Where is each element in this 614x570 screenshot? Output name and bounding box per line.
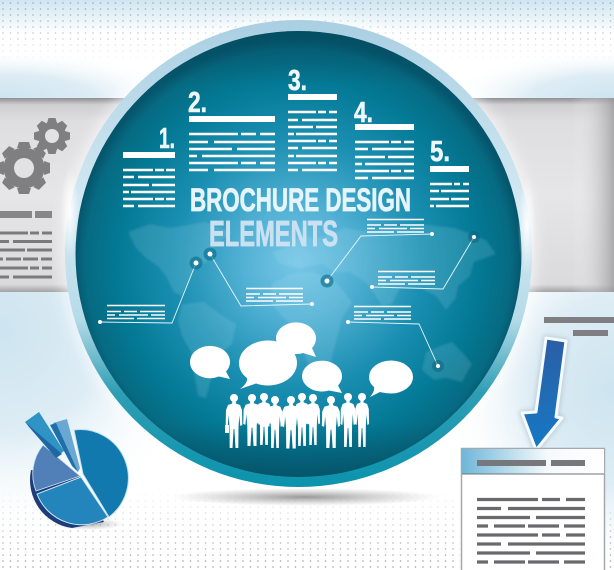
number 4: 4.	[354, 97, 373, 129]
pie slice: large	[74, 430, 128, 517]
bubble 5	[369, 361, 413, 397]
people silhouettes	[225, 393, 369, 448]
title	[190, 182, 411, 254]
circle shadow	[170, 488, 440, 506]
column 5 text lines	[430, 184, 469, 206]
column 1	[123, 123, 175, 206]
column 5	[430, 136, 469, 206]
callout A	[98, 256, 202, 324]
circle halo	[60, 16, 536, 492]
top-right grey bars	[544, 317, 614, 336]
bubble 2	[239, 340, 297, 389]
column 2 heading bar	[189, 116, 275, 122]
pie slice: left	[33, 445, 80, 491]
column 1 text lines	[123, 170, 175, 206]
callout C	[320, 220, 434, 288]
bubble 4	[302, 361, 342, 393]
main circle	[61, 20, 536, 487]
callout E	[346, 306, 444, 372]
exploded wedge 2	[53, 419, 80, 472]
column 4 text lines	[355, 142, 414, 178]
circle disc	[76, 31, 522, 477]
bubble 1	[190, 346, 230, 379]
column 2	[188, 87, 275, 170]
column 5 heading bar	[430, 166, 469, 172]
column 4	[354, 97, 414, 178]
callout D	[370, 231, 480, 289]
title line 1: BROCHURE DESIGN	[190, 182, 411, 218]
pie slice: bottom	[37, 477, 108, 525]
number 2: 2.	[188, 87, 207, 119]
number 1: 1.	[159, 123, 175, 155]
column 3	[288, 65, 337, 170]
text block: left band	[0, 214, 52, 277]
panel: grey band	[0, 98, 614, 292]
circle ring	[65, 20, 532, 487]
column 4 heading bar	[355, 124, 414, 130]
document panel	[462, 448, 604, 570]
title line 2: ELEMENTS	[209, 213, 338, 254]
document sheet	[462, 448, 604, 570]
speech bubbles	[190, 322, 413, 397]
exploded wedge 1	[25, 412, 64, 454]
document header	[462, 449, 604, 474]
pie depth	[30, 470, 104, 528]
column 1 heading bar	[123, 152, 175, 158]
world map	[128, 222, 496, 398]
number 3: 3.	[288, 65, 307, 97]
bubble 3	[276, 322, 316, 357]
document text lines	[477, 500, 585, 562]
column 3 heading bar	[288, 94, 337, 100]
icon: gears	[0, 118, 70, 194]
arrow	[522, 338, 566, 450]
callout B	[204, 248, 314, 306]
column 3 text lines	[288, 112, 337, 170]
pie chart	[25, 412, 128, 530]
column 2 text lines	[189, 134, 275, 170]
number 5: 5.	[430, 136, 450, 168]
